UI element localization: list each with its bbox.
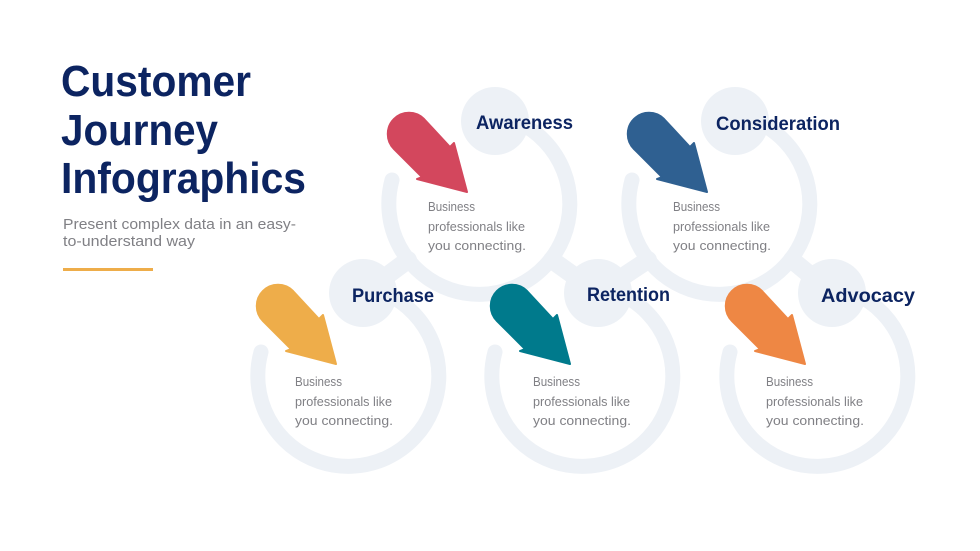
panel: advocacy (726, 259, 915, 466)
body: retention: you connecting. (533, 413, 631, 428)
body: retention (533, 374, 631, 428)
ring: advocacy (727, 294, 908, 466)
ring connectors (365, 260, 832, 293)
node: retention (564, 259, 632, 327)
subtitle (63, 216, 296, 250)
arrow: consideration (628, 113, 707, 192)
subtitle: to-understand way (63, 233, 196, 250)
ring: awareness (389, 122, 570, 294)
heading: retention: Retention (587, 284, 670, 306)
node: consideration (701, 87, 769, 155)
title: Infographics (61, 154, 306, 203)
body: purchase: Business (295, 374, 342, 389)
title: Journey (61, 106, 218, 155)
body: consideration: professionals like (673, 219, 770, 234)
ring: purchase (258, 294, 439, 466)
body: awareness: professionals like (428, 219, 525, 234)
arrow: purchase (257, 285, 336, 364)
body: consideration: you connecting. (673, 238, 771, 253)
node: advocacy (798, 259, 866, 327)
panel: purchase (257, 259, 439, 466)
ring: retention (492, 294, 673, 466)
accent line (63, 268, 153, 271)
heading: purchase: Purchase (352, 285, 434, 307)
body: advocacy: professionals like (766, 394, 863, 409)
heading: awareness: Awareness (476, 112, 573, 134)
body: purchase (295, 374, 393, 428)
panel: awareness (388, 87, 573, 294)
body: consideration (673, 199, 771, 253)
node: purchase (329, 259, 397, 327)
body: awareness: Business (428, 199, 475, 214)
subtitle: Present complex data in an easy- (63, 216, 296, 233)
heading: advocacy: Advocacy (821, 285, 915, 307)
body: advocacy: you connecting. (766, 413, 864, 428)
body: advocacy: Business (766, 374, 813, 389)
ring: consideration (629, 122, 810, 294)
body: advocacy (766, 374, 864, 428)
arrow: awareness (388, 113, 467, 192)
body: purchase: you connecting. (295, 413, 393, 428)
heading: consideration: Consideration (716, 113, 840, 135)
arrow: retention (491, 285, 570, 364)
body: awareness (428, 199, 526, 253)
body: retention: professionals like (533, 394, 630, 409)
title: Customer (61, 57, 251, 106)
panel: consideration (628, 87, 840, 294)
body: retention: Business (533, 374, 580, 389)
body: purchase: professionals like (295, 394, 392, 409)
node: awareness (461, 87, 529, 155)
panel: retention (491, 259, 673, 466)
title (61, 57, 306, 203)
body: awareness: you connecting. (428, 238, 526, 253)
arrow: advocacy (726, 285, 805, 364)
body: consideration: Business (673, 199, 720, 214)
